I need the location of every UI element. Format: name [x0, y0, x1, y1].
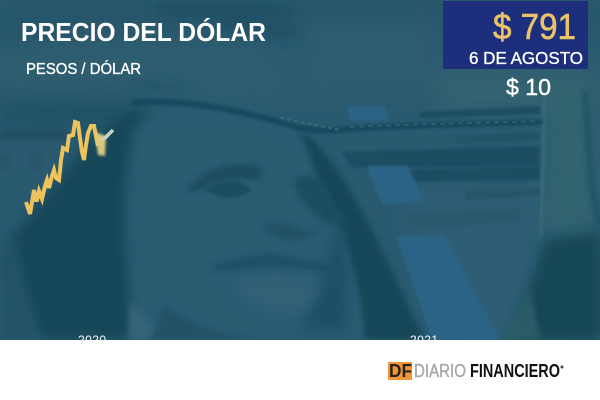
lower-left bill corner	[0, 240, 35, 340]
footer band	[0, 340, 600, 400]
line chart: dollar price	[26, 122, 113, 214]
registered mark	[560, 366, 564, 368]
price value: $ 791	[493, 6, 576, 47]
date: 6 DE AGOSTO	[469, 48, 583, 68]
callout: current price	[443, 1, 588, 69]
logo badge	[388, 362, 412, 380]
blurred strokes of banknote at top	[0, 2, 300, 92]
logo word: Financiero: FINANCIERO	[470, 361, 560, 381]
title: PRECIO DEL DÓLAR	[21, 17, 266, 47]
subtitle: PESOS / DÓLAR	[26, 61, 141, 78]
right bill edge and bottom-right shadow	[500, 90, 600, 340]
face	[126, 110, 425, 340]
hair, left side	[10, 108, 150, 340]
blue serial patches	[347, 106, 500, 340]
logo: Diario Financiero	[388, 361, 564, 381]
axis label 2020: 2020	[78, 333, 106, 347]
price change: $ 10	[506, 74, 551, 100]
logo initials: DF	[389, 361, 412, 381]
banknote border and lettering	[132, 102, 545, 228]
axis label 2021: 2021	[410, 333, 438, 347]
logo word: Diario: DIARIO	[414, 361, 466, 381]
banknote lettering on left	[0, 129, 66, 170]
